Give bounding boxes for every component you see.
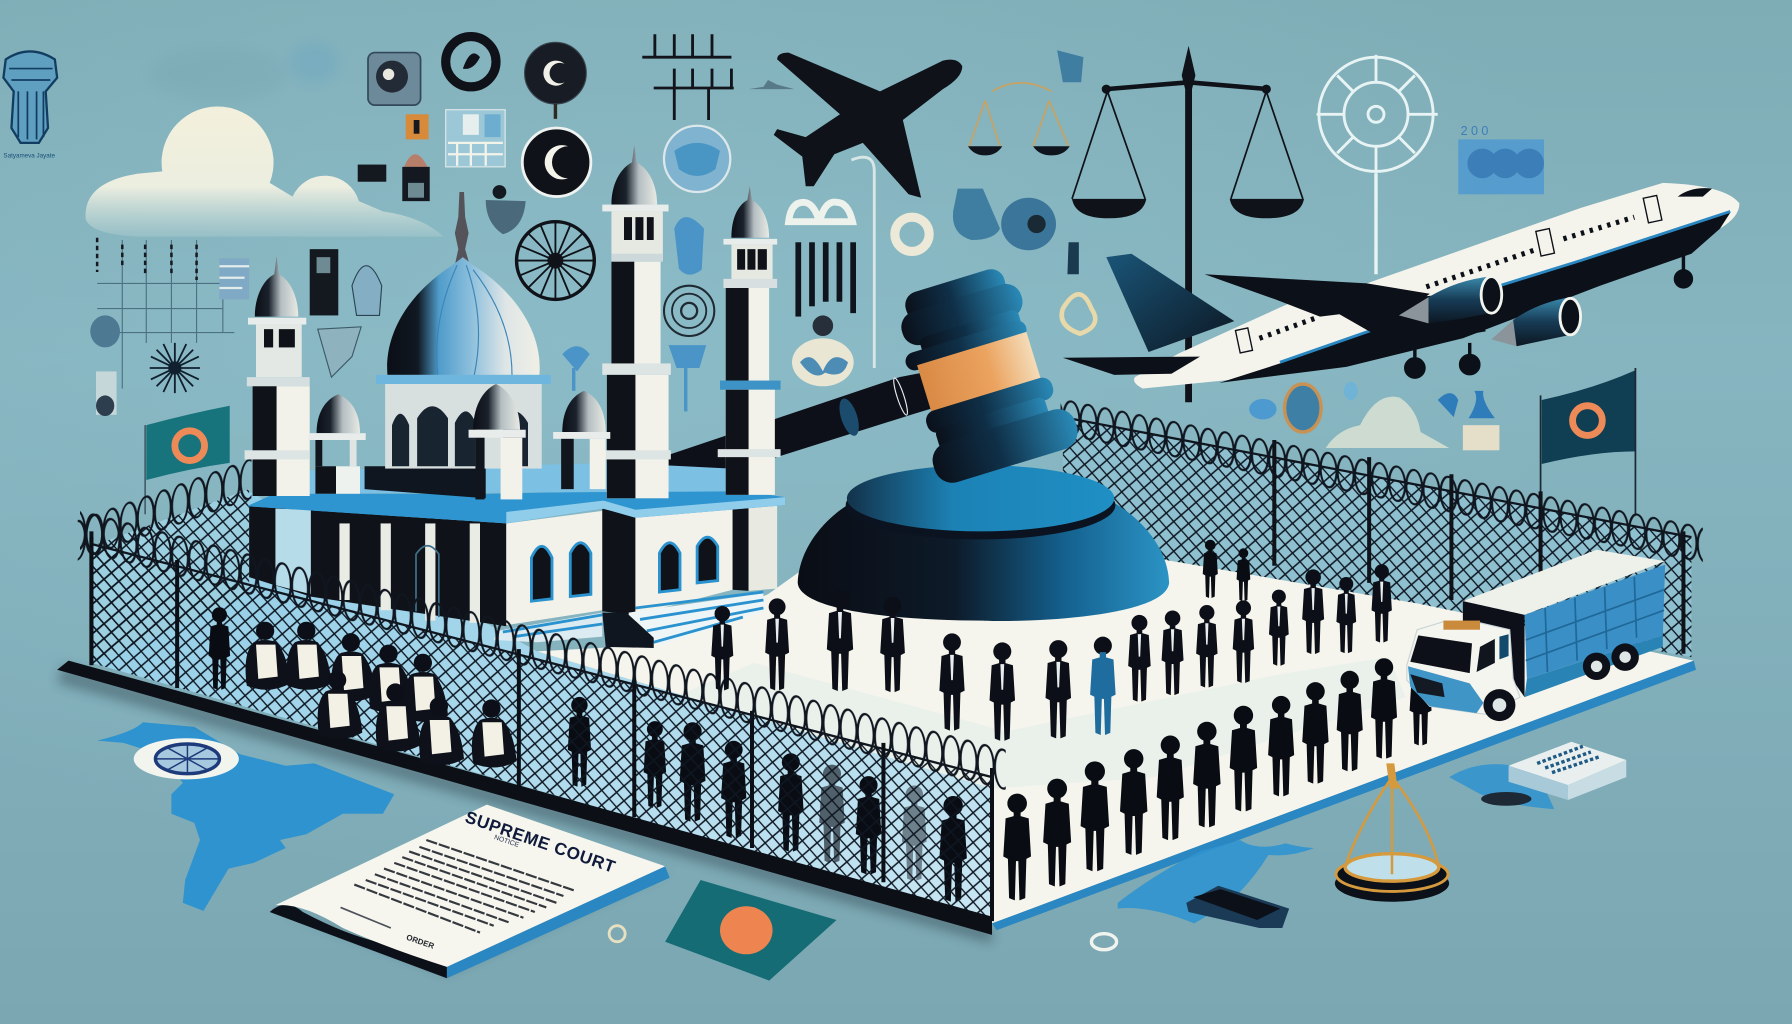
back-right fence — [1061, 394, 1703, 657]
doors — [1235, 195, 1662, 353]
icon: blue disc pair — [953, 189, 1079, 274]
icon: blue tree sketches — [562, 217, 706, 411]
dome finial — [455, 192, 470, 265]
cloud: lower right — [1326, 397, 1449, 448]
tail fin — [1106, 254, 1234, 352]
fuselage — [1134, 183, 1739, 389]
left minaret — [245, 256, 310, 496]
gavel handle — [669, 371, 937, 485]
icon: tall pale lamp post — [851, 157, 874, 368]
cab body — [1407, 622, 1520, 714]
fence posts — [91, 537, 992, 921]
right wall: second bay — [635, 507, 733, 615]
emblem caption: Satyameva Jayate — [3, 153, 55, 160]
icon: sunburst — [150, 343, 200, 393]
back-left fence — [78, 455, 251, 665]
map of India — [97, 722, 394, 911]
gavel head — [883, 258, 1082, 487]
left interior floor — [91, 491, 992, 920]
main wing — [1205, 274, 1430, 337]
small domed pavilions — [309, 384, 610, 499]
icon: cream knot — [1062, 294, 1095, 334]
engine two — [1491, 297, 1581, 346]
cargo roof — [1463, 550, 1665, 615]
cockpit — [1678, 188, 1712, 197]
icon: left flag — [145, 406, 230, 514]
icon: orange tag and dark card — [358, 114, 430, 201]
icon: blue stripes block — [219, 258, 249, 299]
fence posts — [1274, 440, 1683, 654]
icon: grey shell — [486, 185, 526, 234]
icon: pale blue column sketch — [352, 266, 382, 315]
people: group near the mosque — [711, 590, 905, 692]
icon: right flag — [1541, 368, 1635, 514]
engine one — [1399, 277, 1502, 323]
icon: Bangladesh flag on ground — [665, 880, 837, 981]
icon: grey seal — [368, 53, 421, 105]
cargo undercarriage — [1525, 635, 1663, 697]
ground shadow under document — [275, 869, 674, 974]
upper terrace — [299, 463, 731, 494]
icon: white ring — [895, 217, 929, 251]
fence top rail — [91, 544, 992, 777]
icon: candelabra bracket — [642, 34, 734, 120]
icon: ID panel — [446, 110, 505, 167]
icon: concentric ring — [664, 286, 714, 336]
shadow under front fence — [57, 665, 992, 944]
icon: blue banknote — [1458, 124, 1544, 194]
roof slab — [247, 489, 785, 523]
razor wire — [1061, 394, 1703, 566]
cab grille — [1410, 674, 1445, 697]
stabilizer — [1063, 357, 1200, 375]
black pier right — [733, 504, 749, 591]
floor blue edge — [992, 661, 1696, 930]
wheels — [1483, 689, 1515, 721]
cab rear window — [1499, 634, 1509, 659]
windows — [1259, 217, 1634, 338]
icon: blue emblem circle — [664, 126, 730, 192]
signature — [341, 907, 391, 928]
cloud: upper left — [86, 106, 443, 237]
icon: left figure — [90, 315, 120, 416]
icon: black barcode stripes — [795, 242, 856, 317]
cab roof lights — [1443, 621, 1480, 630]
main dome — [376, 192, 551, 469]
icon: black silhouette plane — [774, 53, 962, 198]
faint stipple sketches — [149, 42, 339, 102]
icon: white arches — [789, 202, 853, 222]
gavel striking base — [798, 465, 1169, 621]
people: middle row — [939, 540, 1392, 741]
icon: white stamped box — [1509, 742, 1626, 800]
steps — [494, 613, 602, 642]
black pier — [602, 509, 635, 615]
cab bumper — [1408, 666, 1483, 713]
fence top rail — [1063, 417, 1691, 537]
icon: spoked wheel — [517, 222, 594, 299]
icon: white ship wheel — [1317, 55, 1438, 274]
icon: dark doorway — [310, 249, 338, 315]
heading: SUPREME COURT — [463, 807, 618, 877]
icon: dark circle with C — [525, 42, 586, 119]
icon: black circle with crescent — [522, 128, 591, 197]
people: front row — [1003, 658, 1397, 900]
front-left fence — [57, 503, 1006, 935]
Supreme Court document — [270, 805, 670, 978]
airliner — [1063, 183, 1739, 389]
icon: large balance scale — [1072, 46, 1304, 402]
icon: left grid chart — [97, 238, 234, 389]
icon: torn note — [318, 327, 361, 377]
people: seated detainees — [209, 607, 517, 767]
cab side window — [1477, 639, 1495, 672]
icon: state emblem — [3, 51, 57, 160]
banknote value: 200 — [1461, 124, 1492, 138]
end wall — [749, 503, 777, 591]
small glass ring near document — [609, 926, 625, 942]
stamp text: ORDER — [405, 933, 436, 951]
body text lines — [354, 840, 574, 933]
icon: small plane sketch — [749, 80, 794, 89]
black stair — [602, 613, 654, 648]
white courtyard floor — [537, 560, 1696, 930]
icon: small white ring — [1091, 934, 1117, 950]
truck — [1407, 550, 1665, 721]
cab windshield — [1410, 635, 1472, 673]
fence base strip — [57, 661, 992, 935]
right wall: first bay — [506, 511, 602, 625]
small cluster: right sky icons — [1249, 382, 1499, 450]
left lower wall — [249, 506, 506, 626]
icon: portrait badge — [792, 315, 854, 386]
windows — [531, 537, 718, 601]
center minaret — [602, 145, 671, 498]
Ashoka chakra badge — [134, 738, 239, 779]
pages edge — [447, 866, 670, 978]
blue belly line — [1280, 211, 1730, 362]
razor wire — [80, 503, 1006, 794]
icon: black ring — [446, 37, 496, 87]
fuselage belly — [1219, 213, 1730, 383]
cargo front — [1463, 601, 1525, 697]
right minaret — [718, 186, 781, 495]
landing gear — [1406, 246, 1691, 377]
icon: black tray — [1186, 886, 1289, 928]
people: standing behind the front fence — [568, 697, 967, 902]
subheading: NOTICE — [493, 834, 520, 849]
arched door — [416, 546, 439, 617]
icon: dark top badge — [1057, 50, 1083, 82]
dark smudge beside box — [1481, 792, 1531, 806]
mosque / court building — [245, 145, 785, 648]
icon: small scale — [968, 83, 1070, 155]
cargo side — [1525, 565, 1665, 679]
person beside truck — [1410, 661, 1432, 745]
paper — [275, 805, 665, 967]
blue spill — [1118, 764, 1554, 923]
columns — [339, 523, 480, 623]
icon: golden hanging scale — [1335, 763, 1449, 902]
